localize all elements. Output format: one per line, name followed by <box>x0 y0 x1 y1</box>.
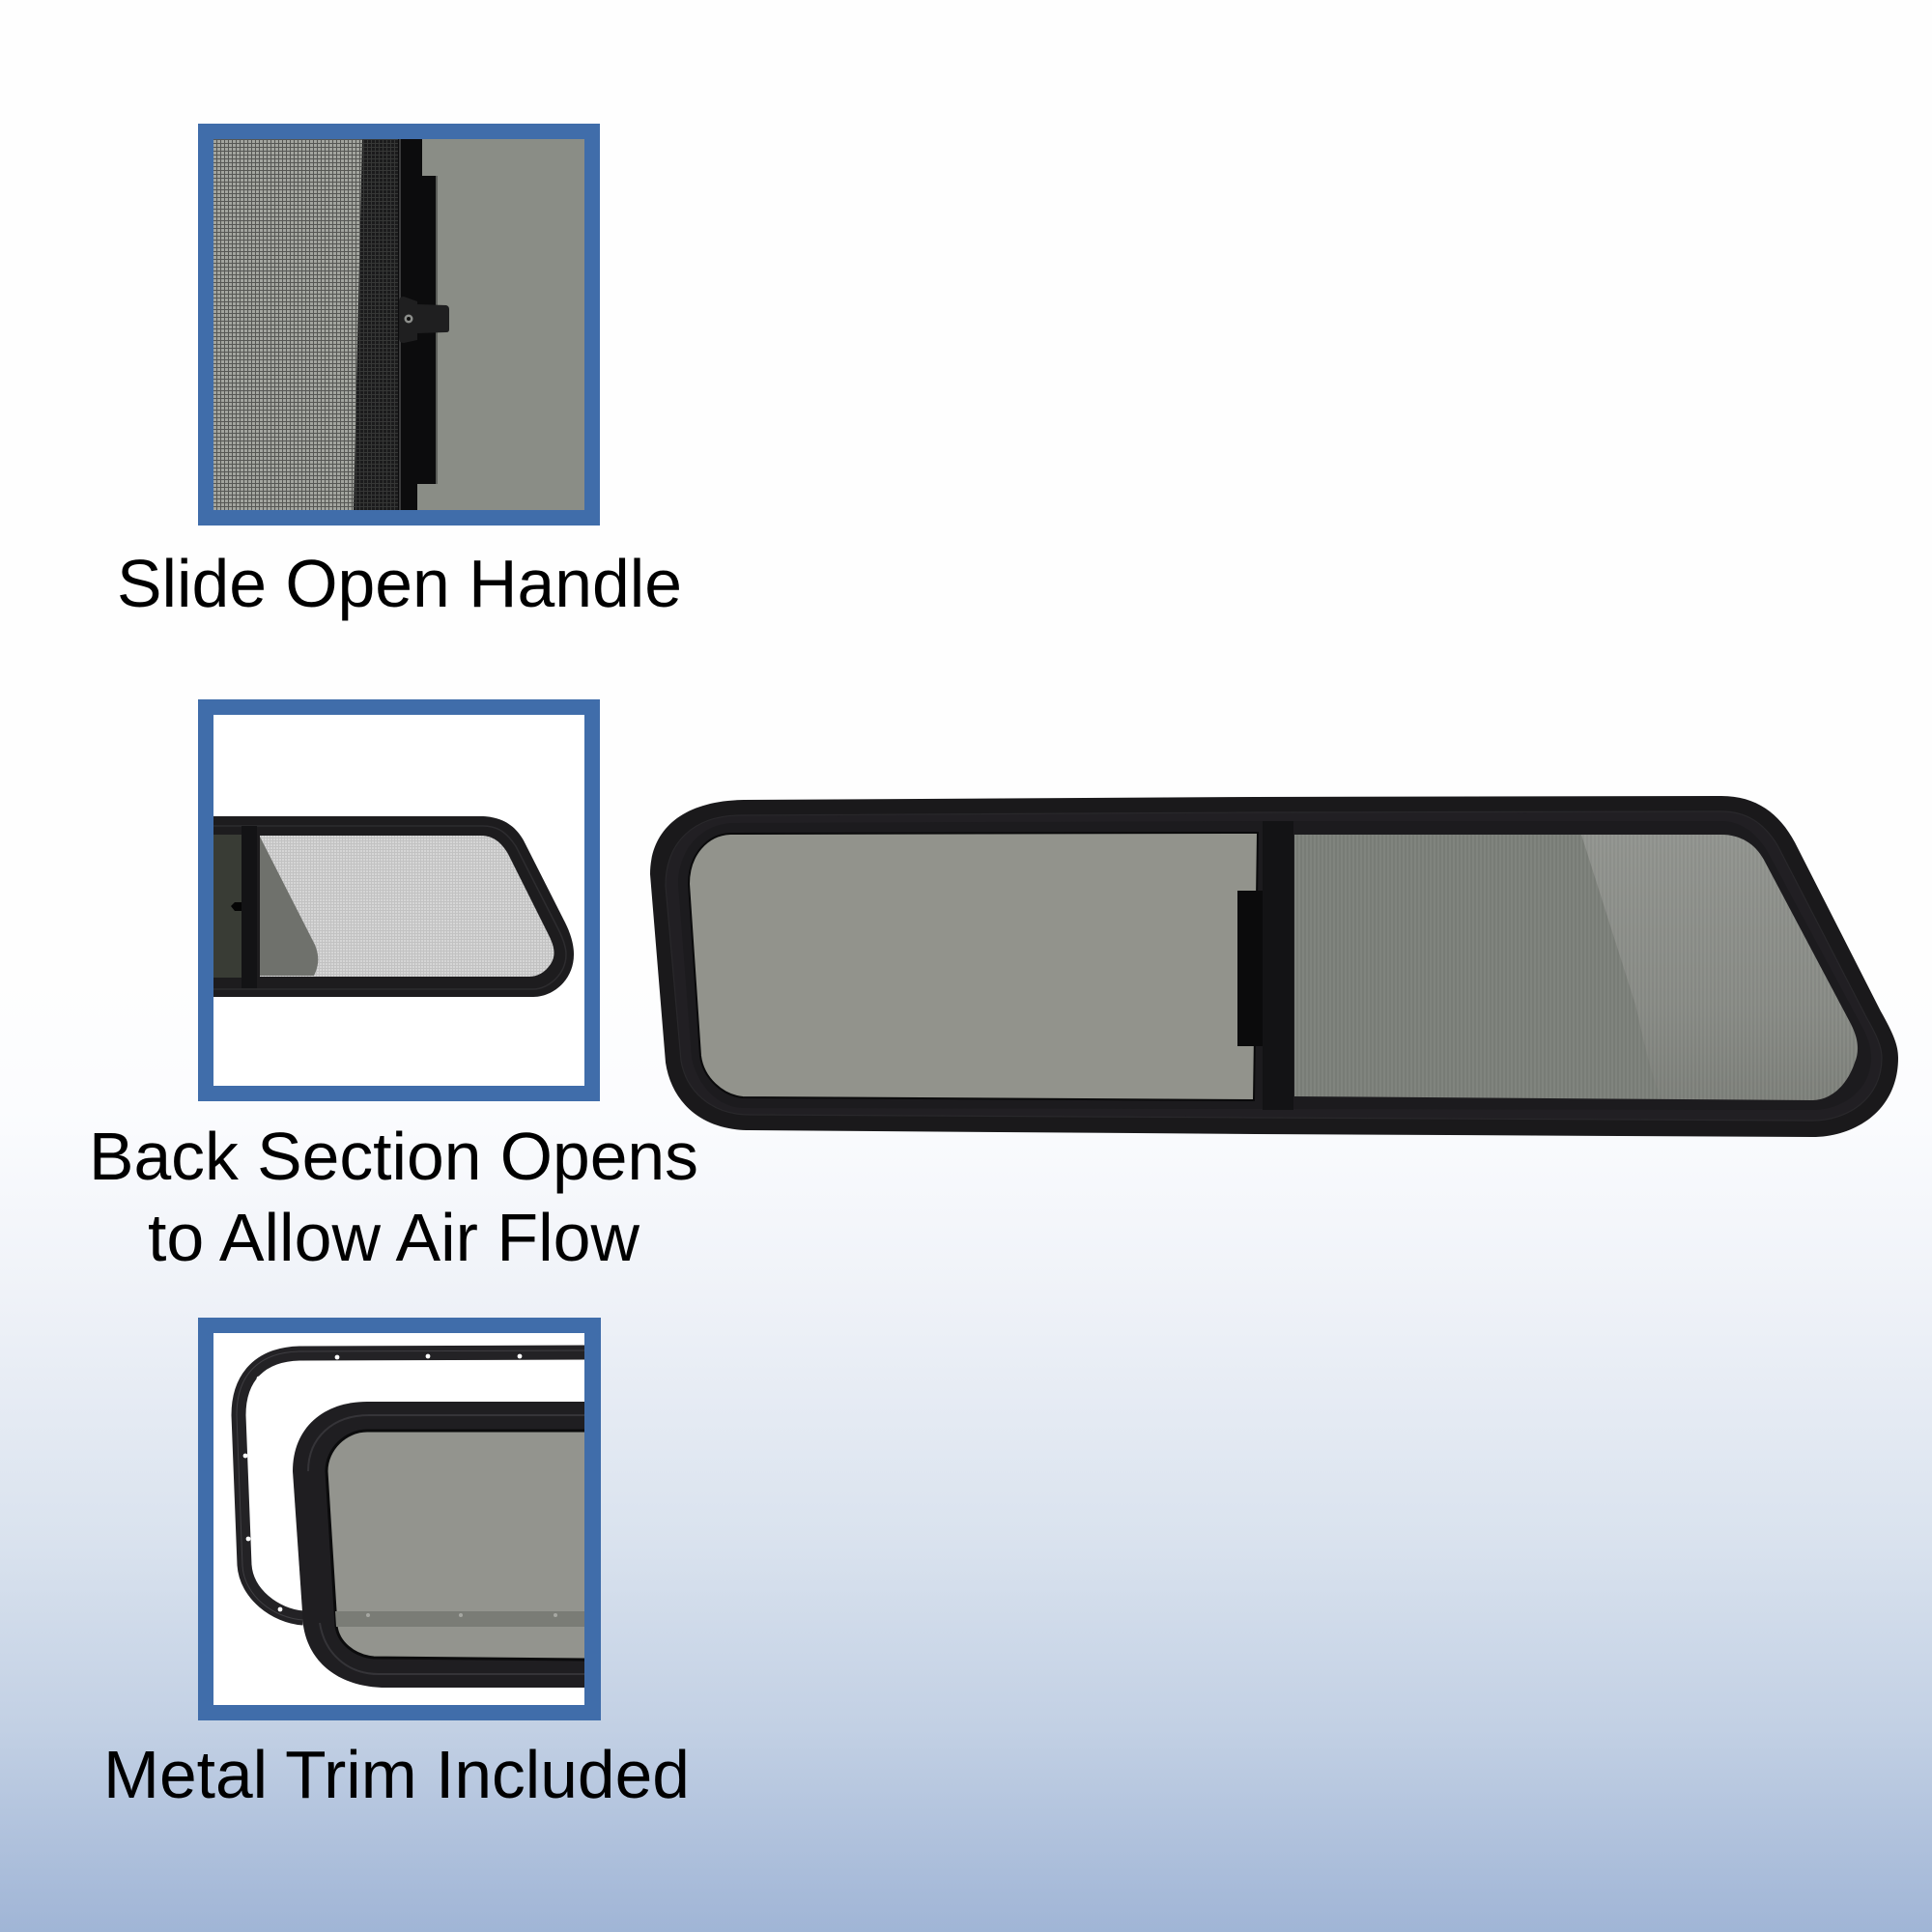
frame inner lip <box>678 821 1871 1110</box>
metal trim ring <box>237 1350 585 1620</box>
panel: slide open handle photo <box>198 124 600 526</box>
small window frame <box>193 816 574 997</box>
glass seen through opening <box>260 837 318 976</box>
black sash rail <box>398 139 437 510</box>
frame step highlight <box>666 811 1882 1121</box>
panel: back section opens photo <box>193 699 600 1101</box>
caption: back section opens: to Allow Air Flow <box>148 1200 639 1275</box>
outer frame <box>650 796 1898 1137</box>
screen mesh over frame, dark <box>354 139 398 510</box>
glass reflection <box>1581 835 1858 1100</box>
latch handle <box>399 297 449 343</box>
glass <box>327 1431 589 1660</box>
trim seen through glass <box>335 1611 589 1627</box>
screened glass panel <box>1294 835 1858 1100</box>
screen mesh, light <box>213 139 362 510</box>
caption: metal trim included: Metal Trim Included <box>103 1737 690 1812</box>
dark closed glass section <box>213 835 242 978</box>
handle channel <box>1237 891 1263 1046</box>
caption: back section opens: Back Section Opens <box>89 1119 698 1194</box>
caption: back section opens <box>89 1119 698 1275</box>
main sliding window product <box>650 796 1898 1137</box>
caption: slide open handle: Slide Open Handle <box>117 546 682 621</box>
window corner frame <box>293 1402 589 1688</box>
panel: metal trim photo <box>198 1318 601 1720</box>
fixed glass panel <box>689 833 1258 1100</box>
mesh screen <box>260 836 554 977</box>
center mullion <box>1263 821 1293 1110</box>
